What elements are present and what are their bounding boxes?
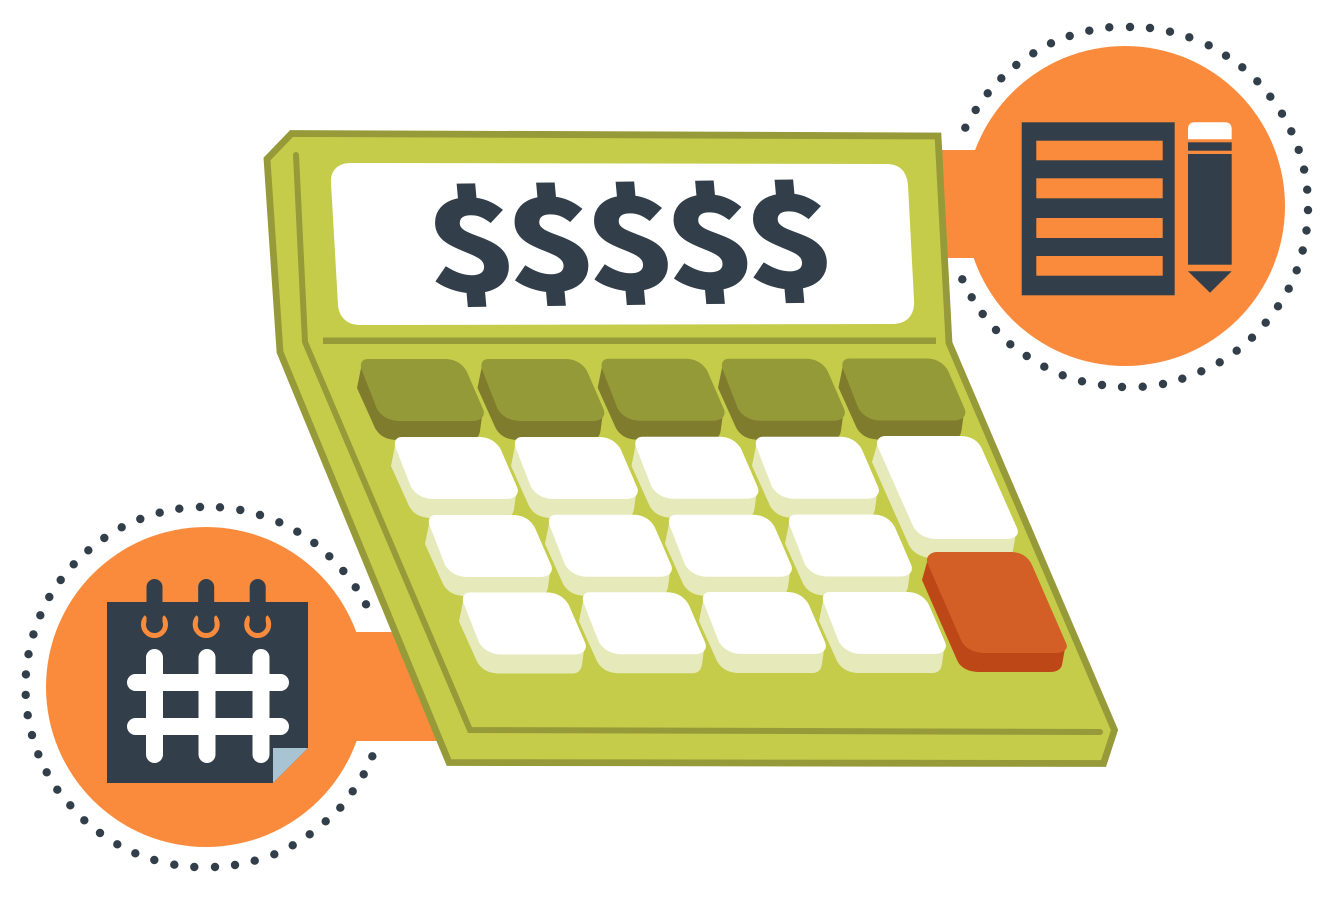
display xyxy=(331,163,914,325)
panel: notes badge xyxy=(930,27,1308,387)
key: large white xyxy=(872,436,1018,558)
orange circle: notes xyxy=(965,46,1285,366)
body inner contour xyxy=(296,155,1100,732)
dotted ring: notes xyxy=(962,27,1308,387)
orange circle: calendar xyxy=(46,527,366,847)
connector: notes to calculator xyxy=(930,150,1000,258)
divider under display xyxy=(323,338,936,344)
icon: document xyxy=(1022,122,1175,295)
display text: $$$$$ xyxy=(419,143,841,327)
panel: calculator xyxy=(267,134,1114,764)
icon: pencil xyxy=(1188,122,1232,293)
connector: calendar to calculator xyxy=(340,632,450,741)
keys: white rows xyxy=(391,437,946,674)
keys: top olive row xyxy=(357,358,965,440)
dotted ring: calendar xyxy=(26,507,372,867)
icon: calendar xyxy=(107,587,308,783)
calculator body xyxy=(267,134,1114,764)
key: orange equals xyxy=(922,552,1067,672)
panel: calendar badge xyxy=(26,507,450,867)
